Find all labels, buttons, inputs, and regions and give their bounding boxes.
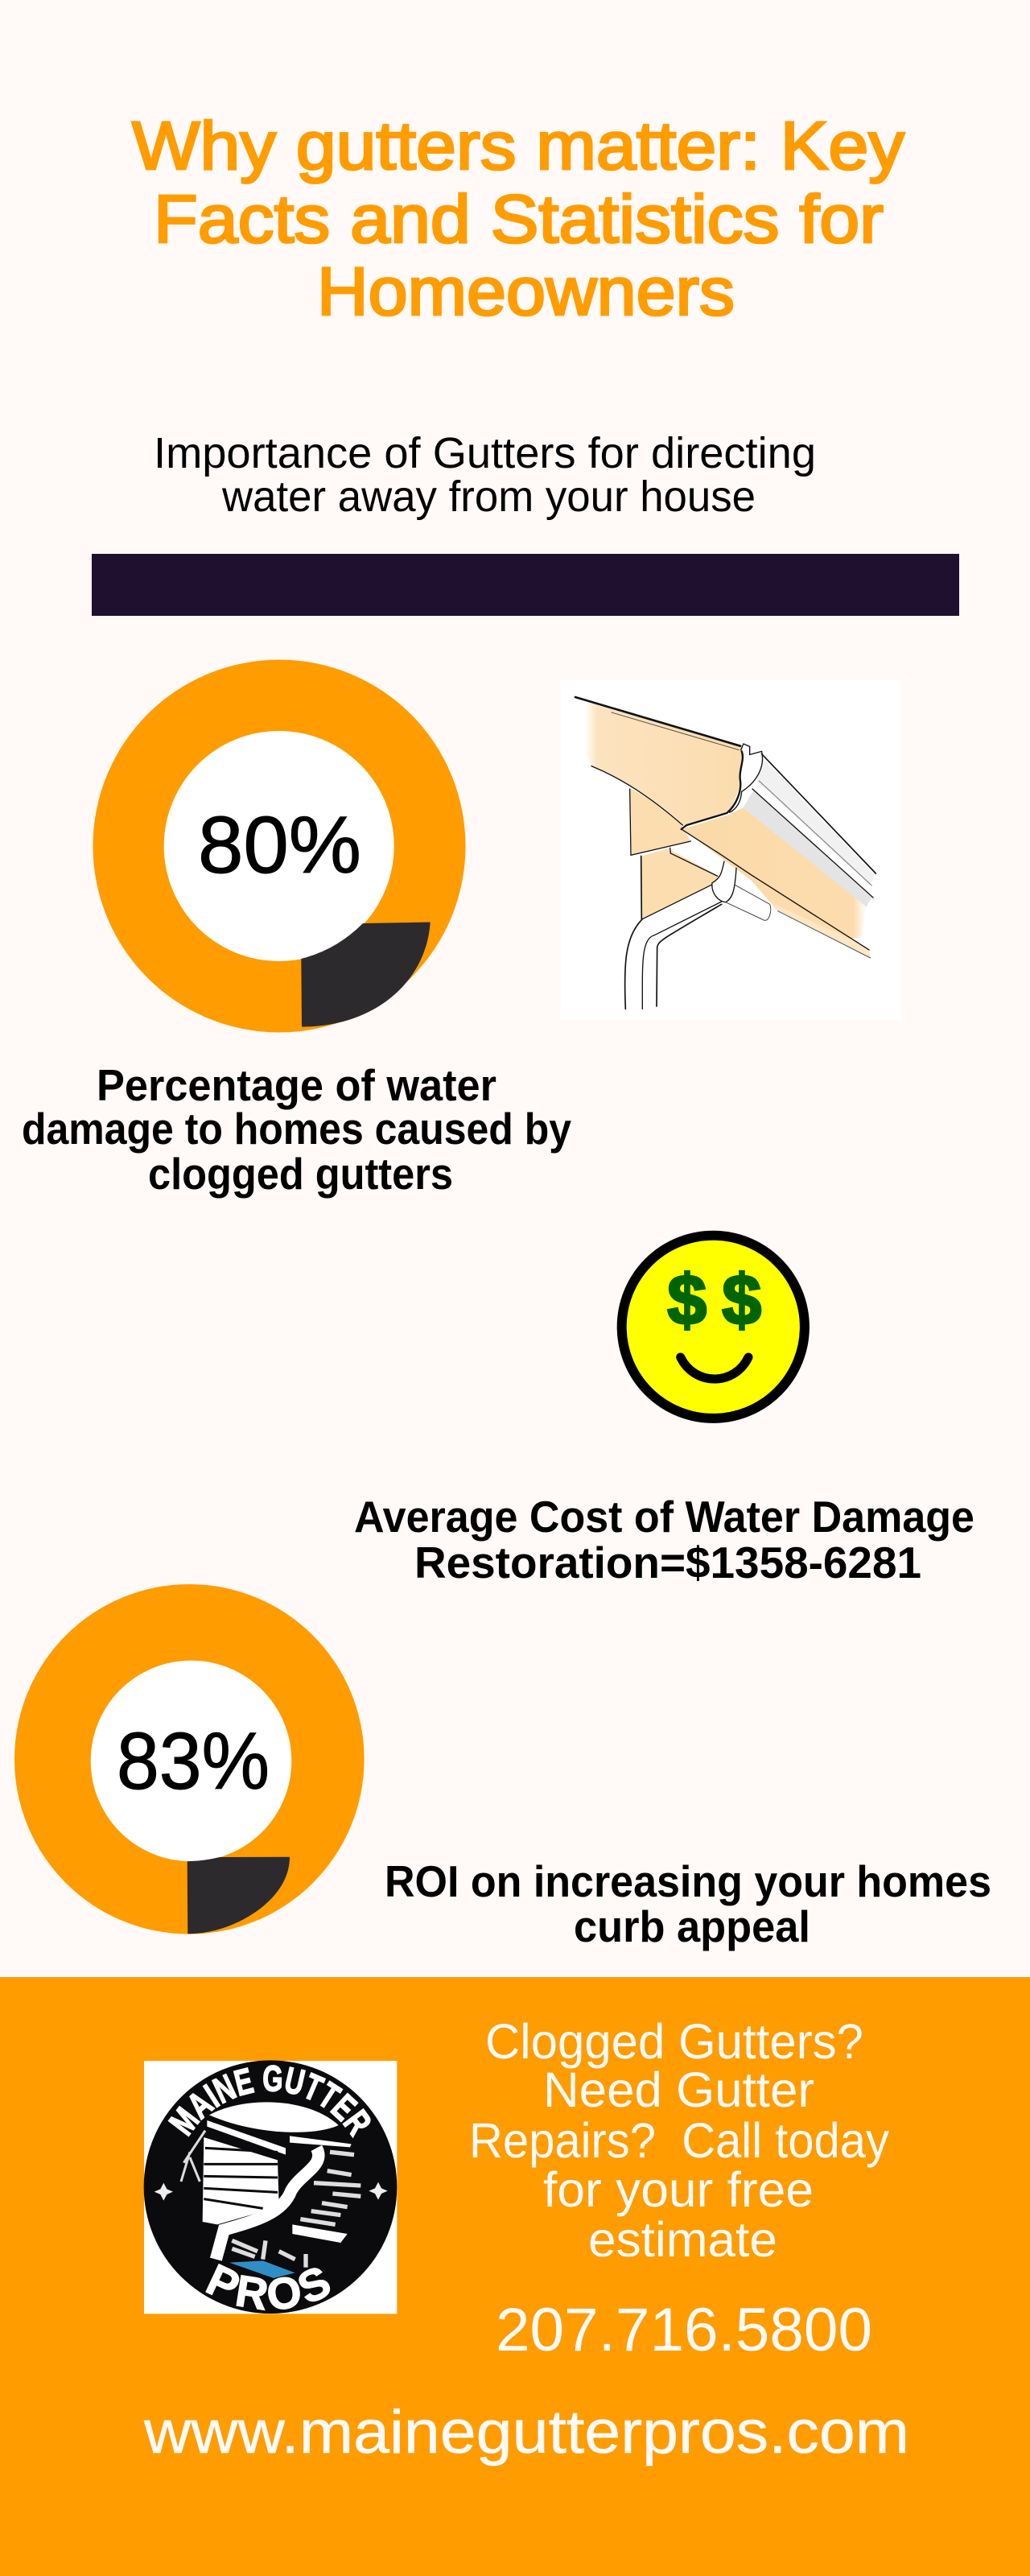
caption: restoration cost: Average Cost of Water Damage: [354, 1492, 974, 1542]
dark banner: [92, 554, 959, 616]
logo: Maine Gutter Pros: [143, 2060, 398, 2314]
caption: water damage percentage: damage to homes caused by: [22, 1104, 571, 1154]
call to action: for your free: [543, 2162, 814, 2217]
icon: money-eyed smiley: $: [667, 1260, 707, 1340]
subtitle: water away from your house: [221, 473, 756, 521]
call to action: Repairs? Call today: [469, 2113, 889, 2168]
title: Homeowners: [317, 254, 735, 329]
title: Why gutters matter: Key: [132, 108, 904, 184]
caption: restoration cost: [354, 1492, 974, 1587]
footer panel: [0, 1977, 1030, 2576]
icon: money-eyed smiley: [622, 1236, 805, 1418]
icon: money-eyed smiley: $: [722, 1260, 761, 1340]
illustration: gutter and downspout: [561, 680, 901, 1020]
caption: curb appeal ROI: [385, 1856, 991, 1951]
subtitle: [154, 429, 816, 521]
website: www.mainegutterpros.com: [143, 2398, 909, 2467]
call to action: Clogged Gutters?: [485, 2014, 863, 2069]
call to action: estimate: [588, 2212, 777, 2267]
caption: curb appeal ROI: ROI on increasing your homes: [385, 1856, 991, 1906]
caption: restoration cost: Restoration=$1358-6281: [414, 1538, 921, 1587]
subtitle: Importance of Gutters for directing: [154, 429, 816, 477]
donut chart: 80%: [93, 660, 465, 1032]
phone number: 207.716.5800: [496, 2296, 872, 2364]
call to action: [469, 2014, 889, 2267]
caption: curb appeal ROI: curb appeal: [574, 1901, 810, 1951]
caption: water damage percentage: clogged gutters: [148, 1149, 453, 1199]
logo: Maine Gutter Pros: MAINE GUTTER: [167, 2065, 371, 2138]
logo: Maine Gutter Pros: PROS: [205, 2264, 330, 2310]
title: Facts and Statistics for: [154, 181, 884, 257]
caption: water damage percentage: Percentage of water: [97, 1060, 496, 1110]
donut chart: 80%: 80%: [198, 800, 361, 890]
title: [132, 108, 904, 329]
donut chart: 83%: [14, 1584, 365, 1934]
caption: water damage percentage: [22, 1060, 571, 1199]
call to action: Need Gutter: [543, 2062, 814, 2117]
donut chart: 83%: 83%: [117, 1716, 270, 1806]
